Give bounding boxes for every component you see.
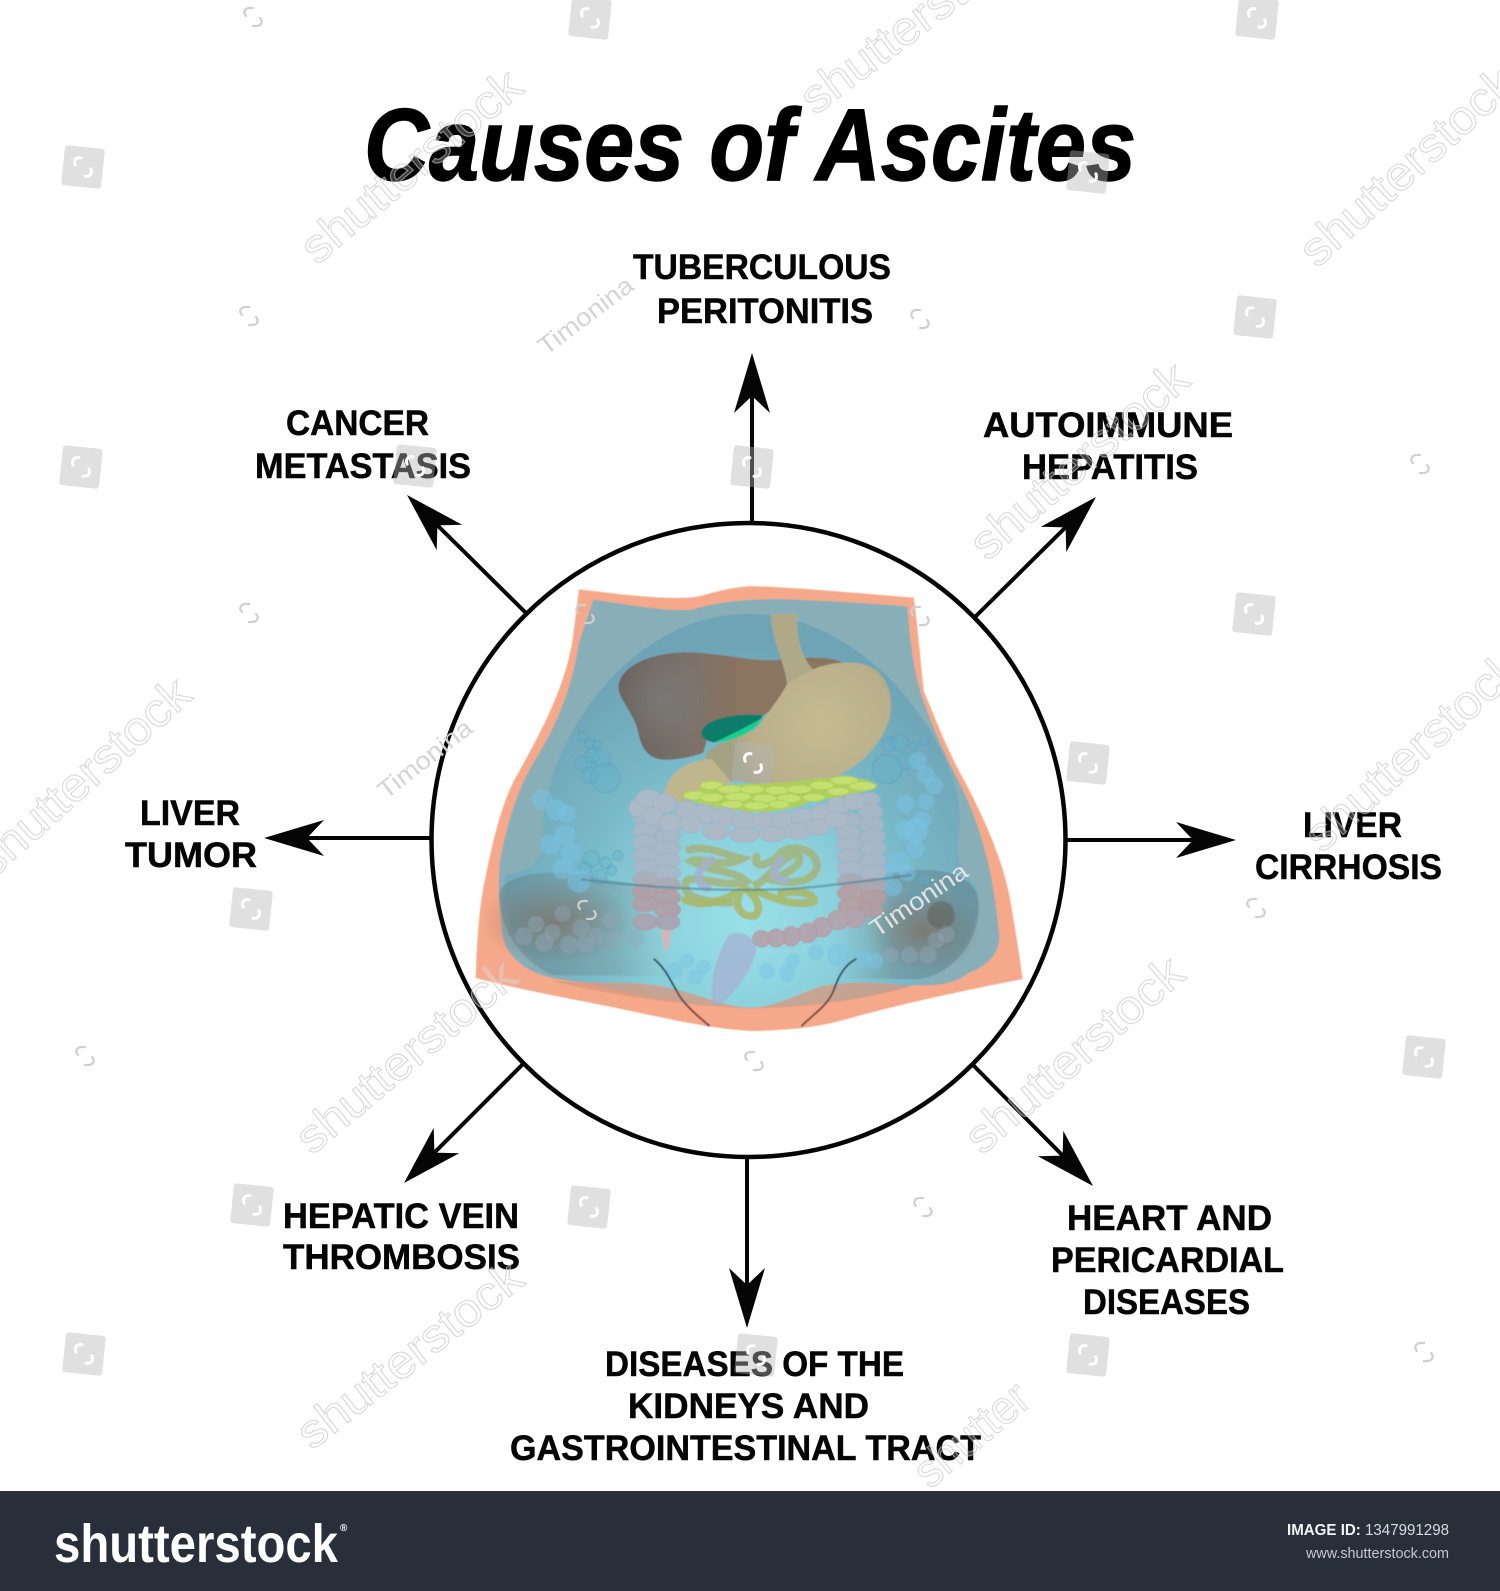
watermark: diagonal stock text: shutterstock (959, 351, 1199, 570)
lower peritoneal reddish shade (552, 981, 912, 1009)
label: liver tumor (125, 794, 257, 875)
body outline: skin (476, 586, 1023, 1031)
bubbles: grey-blue clusters low (515, 906, 954, 964)
ureter right (801, 959, 857, 1026)
colon: sigmoid (752, 908, 865, 947)
label: autoimmune hepatitis: HEPATITIS (1022, 448, 1198, 487)
arrow: upper left (394, 482, 526, 613)
label: hepatic vein thrombosis: THROMBOSIS (283, 1238, 520, 1277)
arrow: right (1065, 822, 1236, 858)
watermark: author name grey: Timonina (533, 271, 639, 361)
dark cyst right (927, 901, 955, 929)
arrow: lower left (391, 1064, 523, 1196)
label: hepatic vein thrombosis: HEPATIC VEIN (283, 1197, 519, 1236)
bubbles: fluid clusters, dark outlined (575, 731, 930, 909)
abdominal cavity (499, 599, 999, 1008)
watermark: diagonal stock text: shutter (902, 1370, 1040, 1498)
label: heart and pericardial diseases: PERICARDIAL (1051, 1241, 1284, 1280)
oesophagus and stomach (663, 614, 891, 804)
watermark: diagonal stock text: shutterstock (286, 1249, 533, 1459)
footer bar (0, 1491, 1500, 1591)
footer website: www.shutterstock.com (1305, 1545, 1449, 1562)
watermark: small outline stamps (76, 8, 1433, 1361)
bubbles: soft blue clusters (532, 752, 943, 985)
label: diseases of kidneys and gastrointestinal tract (510, 1345, 981, 1468)
label: heart and pericardial diseases (1051, 1199, 1284, 1322)
footer logo: shutterstock (54, 1514, 339, 1574)
fluid surface line (581, 875, 912, 890)
colon: ascending limb (632, 810, 681, 930)
watermark: diagonal stock text: shutterstock (284, 948, 527, 1164)
liver (619, 652, 842, 760)
title: Causes of Ascites (364, 88, 1136, 202)
watermark: author name on illustration: Timonina (865, 857, 973, 943)
central circle (432, 523, 1066, 1157)
label: tuberculous peritonitis: TUBERCULOUS (633, 248, 891, 287)
ureter left (654, 959, 710, 1026)
colon: transverse limb (629, 789, 866, 842)
illustration: abdomen with ascites (476, 586, 1023, 1031)
label: liver cirrhosis (1255, 806, 1442, 887)
brown shade right (867, 887, 981, 973)
small intestine (685, 848, 817, 916)
ascites fluid dome (504, 614, 978, 1008)
arrow: upper right (975, 484, 1109, 617)
label: liver cirrhosis: CIRRHOSIS (1255, 848, 1442, 887)
label: liver tumor: TUMOR (125, 836, 257, 875)
label: diseases of kidneys and gastrointestinal tract: KIDNEYS AND (628, 1387, 869, 1426)
label: heart and pericardial diseases: DISEASES (1083, 1283, 1250, 1322)
label: cancer metastasis: CANCER (286, 404, 429, 443)
arrow: left (264, 820, 432, 856)
brown shade left (479, 879, 634, 965)
gallbladder (701, 715, 763, 742)
label: tuberculous peritonitis (633, 248, 891, 331)
label: heart and pericardial diseases: HEART AND (1067, 1199, 1272, 1238)
label: autoimmune hepatitis: AUTOIMMUNE (983, 406, 1233, 445)
label: autoimmune hepatitis (983, 406, 1233, 487)
watermark: diagonal stock text: shutterstock (954, 945, 1194, 1164)
watermark: author name grey: Timonina (372, 714, 478, 805)
arrow: lower right (973, 1065, 1106, 1199)
footer image id: IMAGE ID: 1347991298 (1287, 1522, 1449, 1539)
label: diseases of kidneys and gastrointestinal tract: DISEASES OF THE (605, 1345, 904, 1384)
label: cancer metastasis: METASTASIS (255, 447, 471, 486)
colon: descending limb (836, 792, 886, 917)
label: liver cirrhosis: LIVER (1303, 806, 1402, 845)
pancreas (682, 776, 878, 812)
lower band of fluid (499, 870, 979, 979)
watermark: diagonal stock text: shutterstock (289, 58, 532, 274)
label: diseases of kidneys and gastrointestinal tract: GASTROINTESTINAL TRACT (510, 1429, 981, 1468)
arrow: bottom (729, 1157, 765, 1328)
label: hepatic vein thrombosis (283, 1197, 520, 1277)
label: liver tumor: LIVER (140, 794, 240, 833)
rectum (712, 933, 756, 1006)
appendix (661, 930, 671, 951)
watermark: author name grey (372, 271, 639, 805)
footer logo: ® (340, 1523, 348, 1534)
arrow: top (734, 353, 770, 523)
label: cancer metastasis (255, 404, 471, 486)
label: tuberculous peritonitis: PERITONITIS (657, 292, 873, 331)
